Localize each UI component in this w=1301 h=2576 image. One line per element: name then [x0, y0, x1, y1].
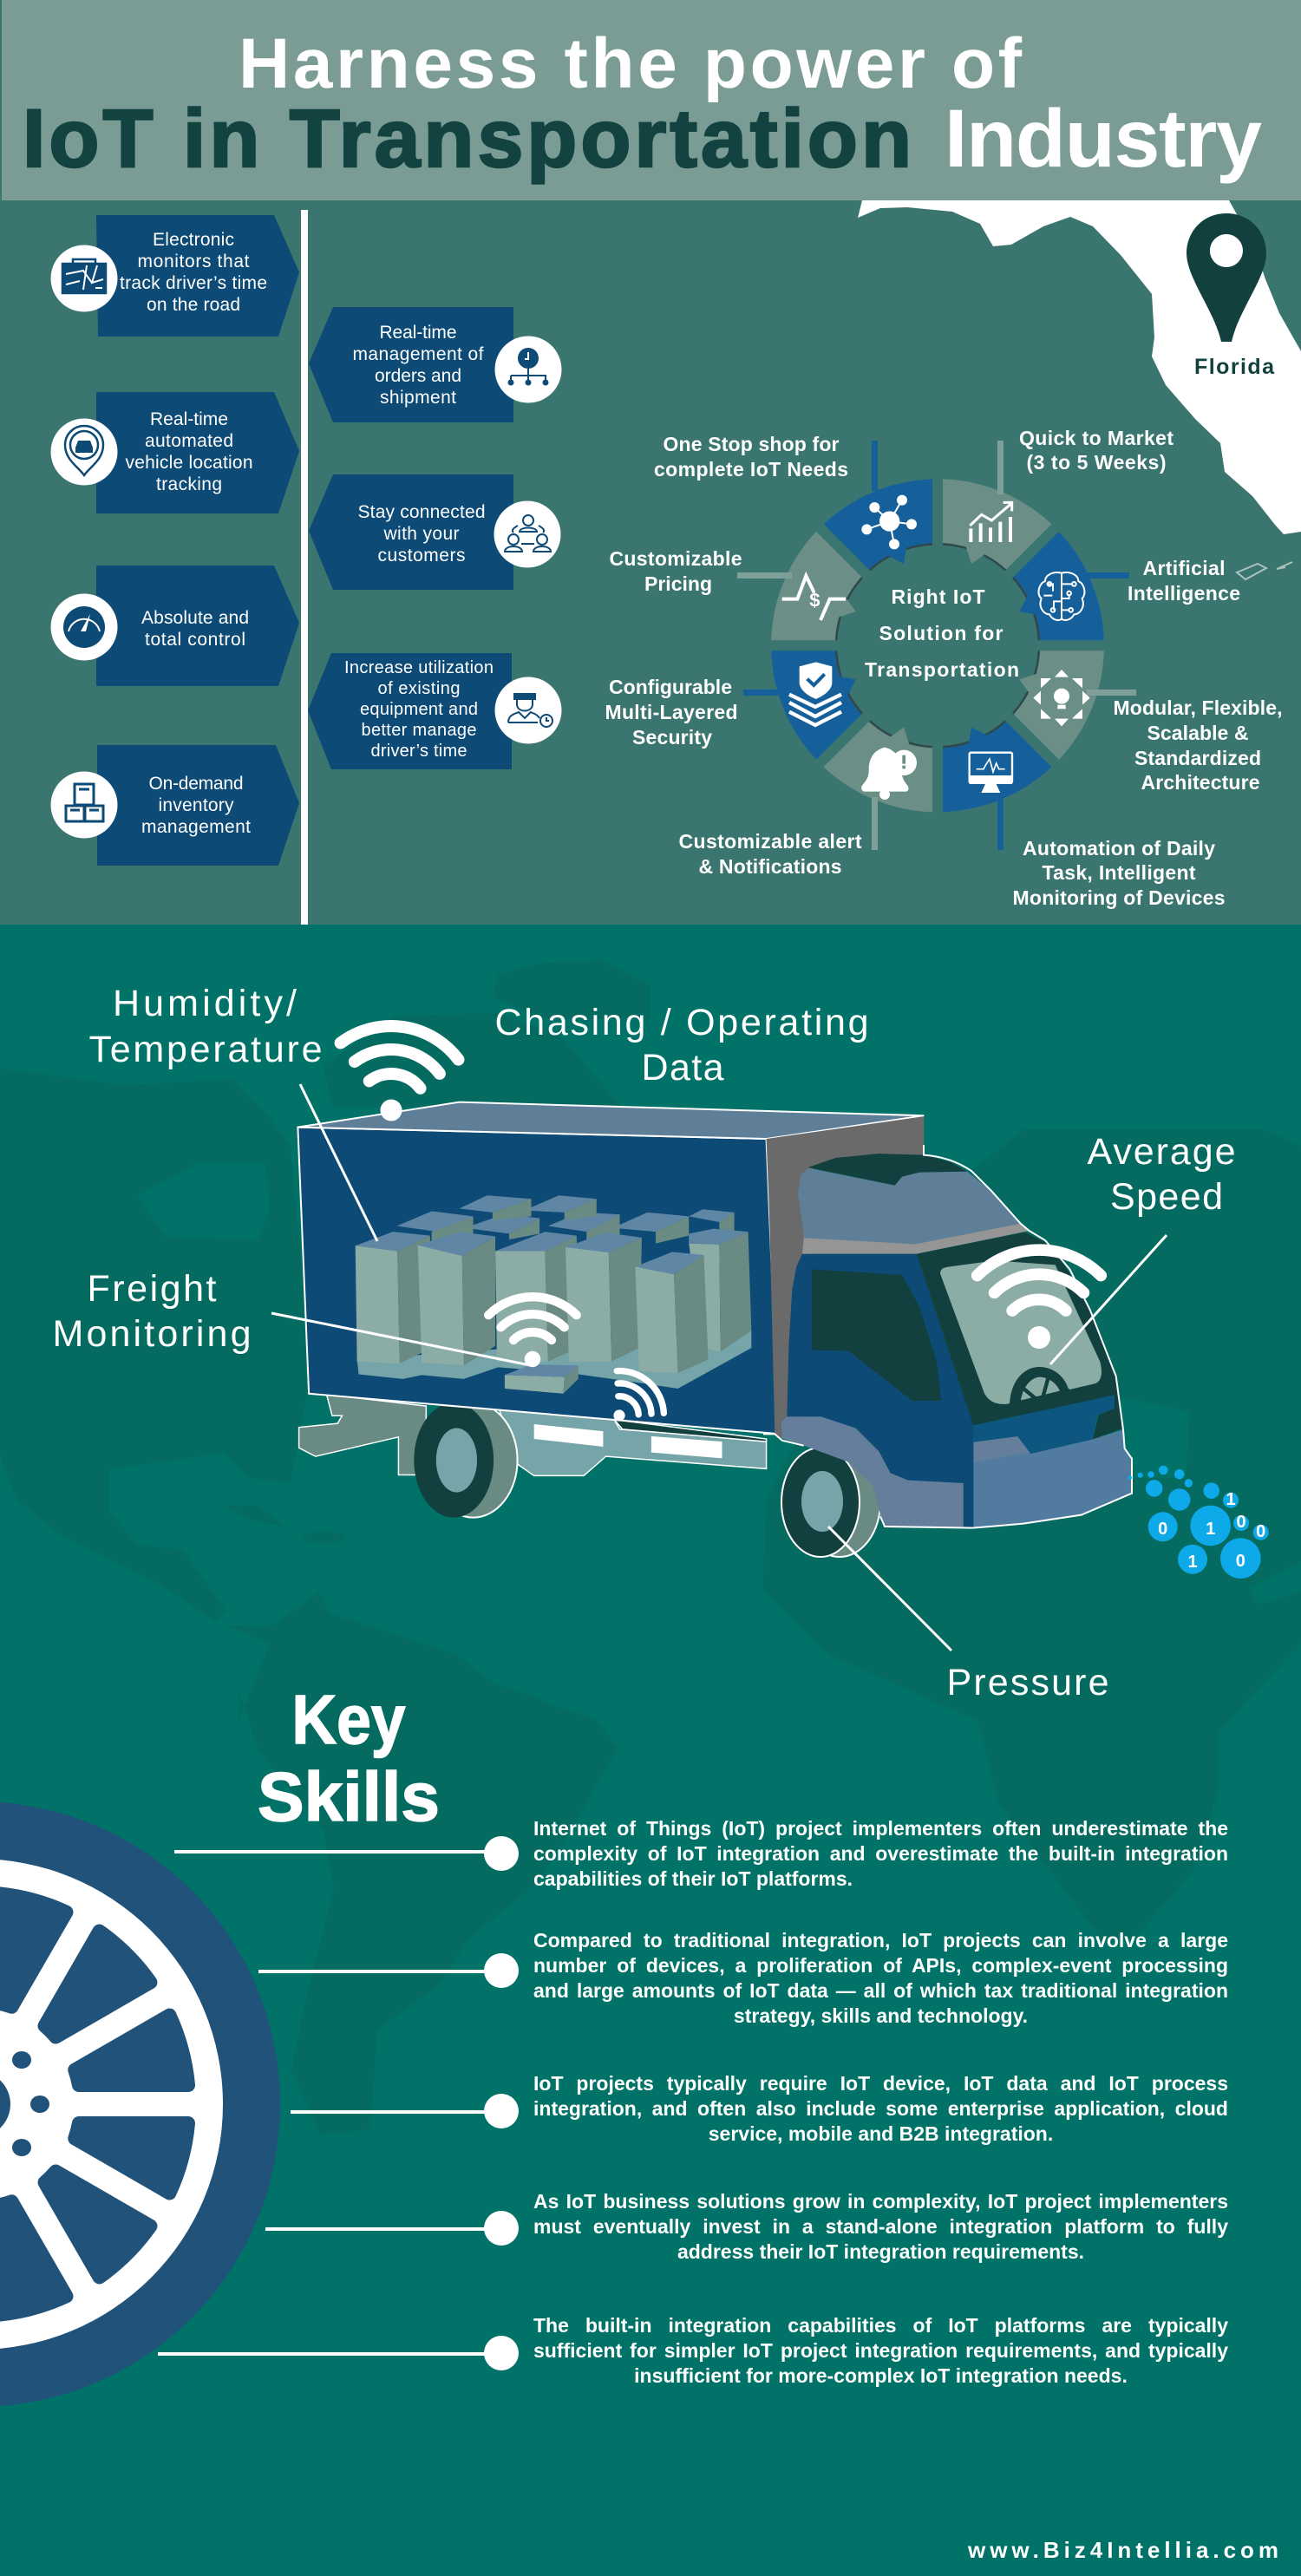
- binary data bubbles: 0: [1158, 1520, 1167, 1539]
- sensor pallet: [505, 1364, 579, 1394]
- label: artificial intelligence: [1128, 557, 1240, 605]
- label: automation of daily task: [1013, 837, 1225, 909]
- roof stripe: [802, 1224, 1030, 1254]
- panel: real-time management: orders and: [375, 366, 461, 386]
- panel: real-time management: shipment: [380, 388, 456, 408]
- cab rear grey: [768, 1145, 924, 1438]
- box 1: [356, 1232, 430, 1252]
- label: average speed: [1088, 1131, 1235, 1218]
- icon: monitor pulse: [970, 753, 1012, 793]
- binary data bubbles: 1: [1226, 1490, 1236, 1509]
- cab outline: [763, 1145, 1132, 1528]
- chassis side step: [498, 1406, 767, 1475]
- section background: upper panel: [0, 0, 1301, 925]
- panel: vehicle location tracking: automated: [145, 431, 233, 451]
- cab door: [787, 1254, 973, 1528]
- text block: skill 3: [533, 2072, 1228, 2145]
- label: Florida: Florida: [1194, 355, 1275, 379]
- windshield frame: [917, 1232, 1123, 1439]
- label: pressure: Pressure: [947, 1662, 1108, 1703]
- icon: dollar pulse: [782, 576, 846, 620]
- panel: increase utilization: [308, 653, 562, 769]
- chassis rear: [299, 1395, 426, 1475]
- text block: skill 1: capabilities of their IoT platforms.: [533, 1867, 853, 1890]
- title: Harness the power of: [239, 24, 1023, 103]
- text block: skill 5: sufficient for simpler IoT project integration requirements, and typically: [533, 2339, 1228, 2362]
- heading: key skills: Skills: [258, 1758, 440, 1835]
- icon: stacked boxes: [66, 784, 103, 821]
- icon: clock with hierarchy: [508, 348, 548, 385]
- icon: adaptable bulb: [1033, 670, 1090, 726]
- panel: stay connected: [309, 474, 560, 590]
- label: average speed: Average: [1088, 1131, 1235, 1173]
- panel: increase utilization: Increase utilization: [344, 658, 494, 677]
- icon: driver with clock: [508, 694, 552, 727]
- header band: [0, 0, 1301, 200]
- text block: skill 5: The built-in integration capabilities of IoT platforms are typically: [533, 2314, 1228, 2337]
- text block: skill 4: [533, 2190, 1228, 2263]
- cab lower front: [973, 1429, 1132, 1528]
- panel: electronic monitors: track driver’s time: [120, 273, 267, 293]
- label: humidity temperature: Humidity/: [113, 983, 297, 1024]
- label: quick to market: (3 to 5 Weeks): [1027, 451, 1166, 474]
- label: freight monitoring: Monitoring: [52, 1313, 252, 1355]
- label: artificial intelligence: Artificial: [1143, 557, 1225, 579]
- text block: skill 5: insufficient for more-complex IoT integration needs.: [634, 2364, 1128, 2387]
- heading: key skills: [258, 1681, 440, 1835]
- text block: skill 2: and large amounts of IoT data — all of which tax traditional integration: [533, 1979, 1228, 2002]
- cab roof: [798, 1168, 1021, 1244]
- panel: absolute and total control: [50, 566, 299, 686]
- panel: on-demand inventory: management: [141, 817, 251, 837]
- connector: skill 2: [258, 1953, 519, 1988]
- panel: increase utilization: driver’s time: [371, 742, 467, 761]
- text block: skill 2: [533, 1929, 1228, 2027]
- label: one stop shop: complete IoT Needs: [654, 458, 848, 481]
- icon: growth chart: [970, 502, 1012, 542]
- front grille strip: [973, 1395, 1115, 1454]
- text block: skill 4: As IoT business solutions grow in complexity, IoT project implementers: [533, 2190, 1228, 2213]
- ring chart: right IoT solution: [764, 472, 1111, 819]
- title: Industry: [945, 93, 1262, 185]
- label: customizable pricing: Customizable: [609, 547, 742, 570]
- connector: skill 1: [174, 1836, 519, 1871]
- text block: skill 1: complexity of IoT integration and overestimate the built-in integration: [533, 1842, 1228, 1865]
- binary data bubbles: 0: [1236, 1552, 1245, 1571]
- panel: real-time management: management of: [352, 344, 484, 364]
- panel: on-demand inventory: inventory: [158, 795, 234, 815]
- icon: alert bell: [861, 748, 917, 800]
- panel: real-time management: Real-time: [380, 323, 456, 343]
- label: automation of daily task: Monitoring of Devices: [1013, 886, 1225, 909]
- footer url: www.Biz4Intellia.com: [967, 2537, 1278, 2563]
- label: artificial intelligence: Intelligence: [1128, 582, 1240, 605]
- title: [23, 24, 1262, 185]
- icon: connected people: [505, 515, 551, 552]
- rear wheel: [414, 1403, 518, 1518]
- box 3: [495, 1232, 577, 1252]
- wifi: chassis sensor: [592, 1361, 672, 1441]
- label: modular architecture: [1114, 696, 1282, 794]
- text block: skill 3: IoT projects typically require IoT device, IoT data and IoT process: [533, 2072, 1228, 2095]
- label: one stop shop: One Stop shop for: [663, 433, 840, 455]
- front wheel: [781, 1448, 880, 1557]
- text block: skill 2: number of devices, a proliferation of APIs, complex-event processing: [533, 1954, 1228, 1977]
- icon: speed gauge: [63, 606, 105, 648]
- icon: network hub: [862, 496, 916, 548]
- panel: on-demand inventory: [50, 745, 299, 866]
- panel: on-demand inventory: On-demand: [149, 774, 243, 794]
- label: automation of daily task: Automation of Daily: [1023, 837, 1215, 860]
- panel: vehicle location tracking: [50, 392, 299, 513]
- label: configurable security: Configurable: [609, 676, 732, 698]
- box 2: [418, 1232, 495, 1256]
- wifi: freight sensor: [488, 1297, 577, 1367]
- cargo boxes: [356, 1195, 751, 1389]
- label: configurable security: Security: [632, 726, 712, 749]
- text block: skill 3: service, mobile and B2B integration.: [709, 2122, 1053, 2145]
- heading: key skills: Key: [291, 1681, 406, 1758]
- label: customizable alert: [678, 830, 862, 878]
- label: customizable alert: Customizable alert: [678, 830, 862, 853]
- label: one stop shop: [654, 433, 848, 481]
- text block: skill 1: Internet of Things (IoT) project implementers often underestimate the: [533, 1817, 1228, 1840]
- panel: electronic monitors: [50, 215, 299, 337]
- leader lines: [271, 1084, 1167, 1651]
- panel: stay connected: customers: [378, 546, 465, 566]
- label: automation of daily task: Task, Intelligent: [1043, 861, 1196, 884]
- panel: absolute and total control: total control: [145, 630, 245, 650]
- panel: electronic monitors: on the road: [147, 295, 240, 315]
- box 6: [689, 1229, 749, 1245]
- text block: skill 2: strategy, skills and technology.: [734, 2004, 1028, 2027]
- text block: skill 5: [533, 2314, 1228, 2387]
- panel: vehicle location tracking: Real-time: [150, 409, 228, 429]
- connector: skill 5: [158, 2336, 519, 2370]
- box 4: [566, 1232, 642, 1252]
- binary data bubbles: 0: [1236, 1513, 1246, 1532]
- label: configurable security: [605, 676, 737, 749]
- wifi: roof sensor: [330, 1018, 461, 1129]
- label: humidity temperature: [88, 983, 323, 1070]
- label: modular architecture: Architecture: [1141, 771, 1259, 794]
- label: modular architecture: Scalable &: [1147, 722, 1249, 744]
- fender: [781, 1416, 964, 1528]
- label: humidity temperature: Temperature: [88, 1029, 323, 1070]
- text block: skill 2: Compared to traditional integration, IoT projects can involve a large: [533, 1929, 1228, 1952]
- icon: car in location pin: [65, 426, 103, 475]
- illustration: tire: [0, 1801, 280, 2407]
- binary data bubbles: 1: [1187, 1553, 1198, 1572]
- panel: stay connected: with your: [383, 524, 460, 544]
- icon: dollar pulse: $: [809, 589, 820, 611]
- label: chasing operating data: Data: [642, 1047, 724, 1089]
- steering wheel: [1010, 1367, 1069, 1407]
- title: IoT in Transportation: [23, 93, 912, 185]
- side window: [812, 1269, 941, 1401]
- label: modular architecture: Modular, Flexible,: [1114, 696, 1282, 719]
- label: freight monitoring: Freight: [87, 1268, 217, 1310]
- binary data bubbles: 1: [1206, 1520, 1215, 1539]
- panel: electronic monitors: monitors that: [137, 252, 250, 271]
- label: average speed: Speed: [1110, 1176, 1223, 1218]
- panel: vehicle location tracking: tracking: [156, 474, 222, 494]
- binary data bubbles: 0: [1256, 1522, 1265, 1541]
- icon: map display: [62, 259, 106, 293]
- vertical divider: [301, 210, 308, 925]
- text block: skill 1: [533, 1817, 1228, 1890]
- panel: electronic monitors: Electronic: [153, 230, 234, 250]
- label: freight monitoring: [52, 1268, 252, 1355]
- sun visor: [808, 1154, 967, 1186]
- label: configurable security: Multi-Layered: [605, 701, 737, 723]
- cargo roof: [297, 1102, 924, 1139]
- ring center text: Solution for: [879, 622, 1004, 644]
- box 5: [635, 1252, 703, 1274]
- map: Florida coastline: [858, 200, 1301, 579]
- panel: real-time management: [309, 307, 562, 422]
- panel: increase utilization: better manage: [361, 721, 477, 740]
- ring center text: Transportation: [865, 658, 1019, 681]
- icon: AI brain: [1039, 572, 1084, 620]
- cargo side panel: [297, 1128, 779, 1434]
- icon: layered security shield: [789, 662, 841, 725]
- label: modular architecture: Standardized: [1134, 747, 1261, 769]
- panel: increase utilization: equipment and: [360, 700, 478, 719]
- label: chasing operating data: Chasing / Operating: [494, 1002, 869, 1043]
- label: quick to market: Quick to Market: [1019, 427, 1174, 449]
- text block: skill 4: address their IoT integration requirements.: [677, 2240, 1084, 2263]
- panel: increase utilization: of existing: [378, 679, 460, 698]
- label: customizable pricing: Pricing: [644, 572, 712, 595]
- text block: skill 4: must eventually invest in a stand-alone integration platform to fully: [533, 2215, 1228, 2238]
- connector: skill 4: [265, 2211, 519, 2246]
- label: chasing operating data: [494, 1002, 869, 1089]
- windshield glass: [940, 1260, 1102, 1404]
- panel: vehicle location tracking: vehicle location: [125, 453, 253, 473]
- cargo front face: [767, 1116, 924, 1434]
- illustration: delivery truck cargo: [297, 1102, 924, 1518]
- label: customizable pricing: [609, 547, 742, 595]
- wifi: windshield sensor: [977, 1250, 1101, 1349]
- label: customizable alert: & Notifications: [699, 855, 841, 878]
- section background: lower world map: [0, 925, 1301, 2576]
- text block: skill 3: integration, and often also include some enterprise application, cloud: [533, 2097, 1228, 2120]
- label: quick to market: [1019, 427, 1174, 474]
- panel: absolute and total control: Absolute and: [141, 608, 249, 628]
- illustration: truck cab: [763, 1145, 1132, 1528]
- ring center text: [865, 585, 1019, 681]
- pin: Florida location: [1187, 213, 1266, 342]
- ring connector lines: [737, 441, 1136, 850]
- ring center text: Right IoT: [892, 585, 985, 608]
- binary data bubbles: [1128, 1466, 1269, 1579]
- connector: skill 3: [291, 2094, 519, 2128]
- panel: stay connected: Stay connected: [357, 502, 486, 522]
